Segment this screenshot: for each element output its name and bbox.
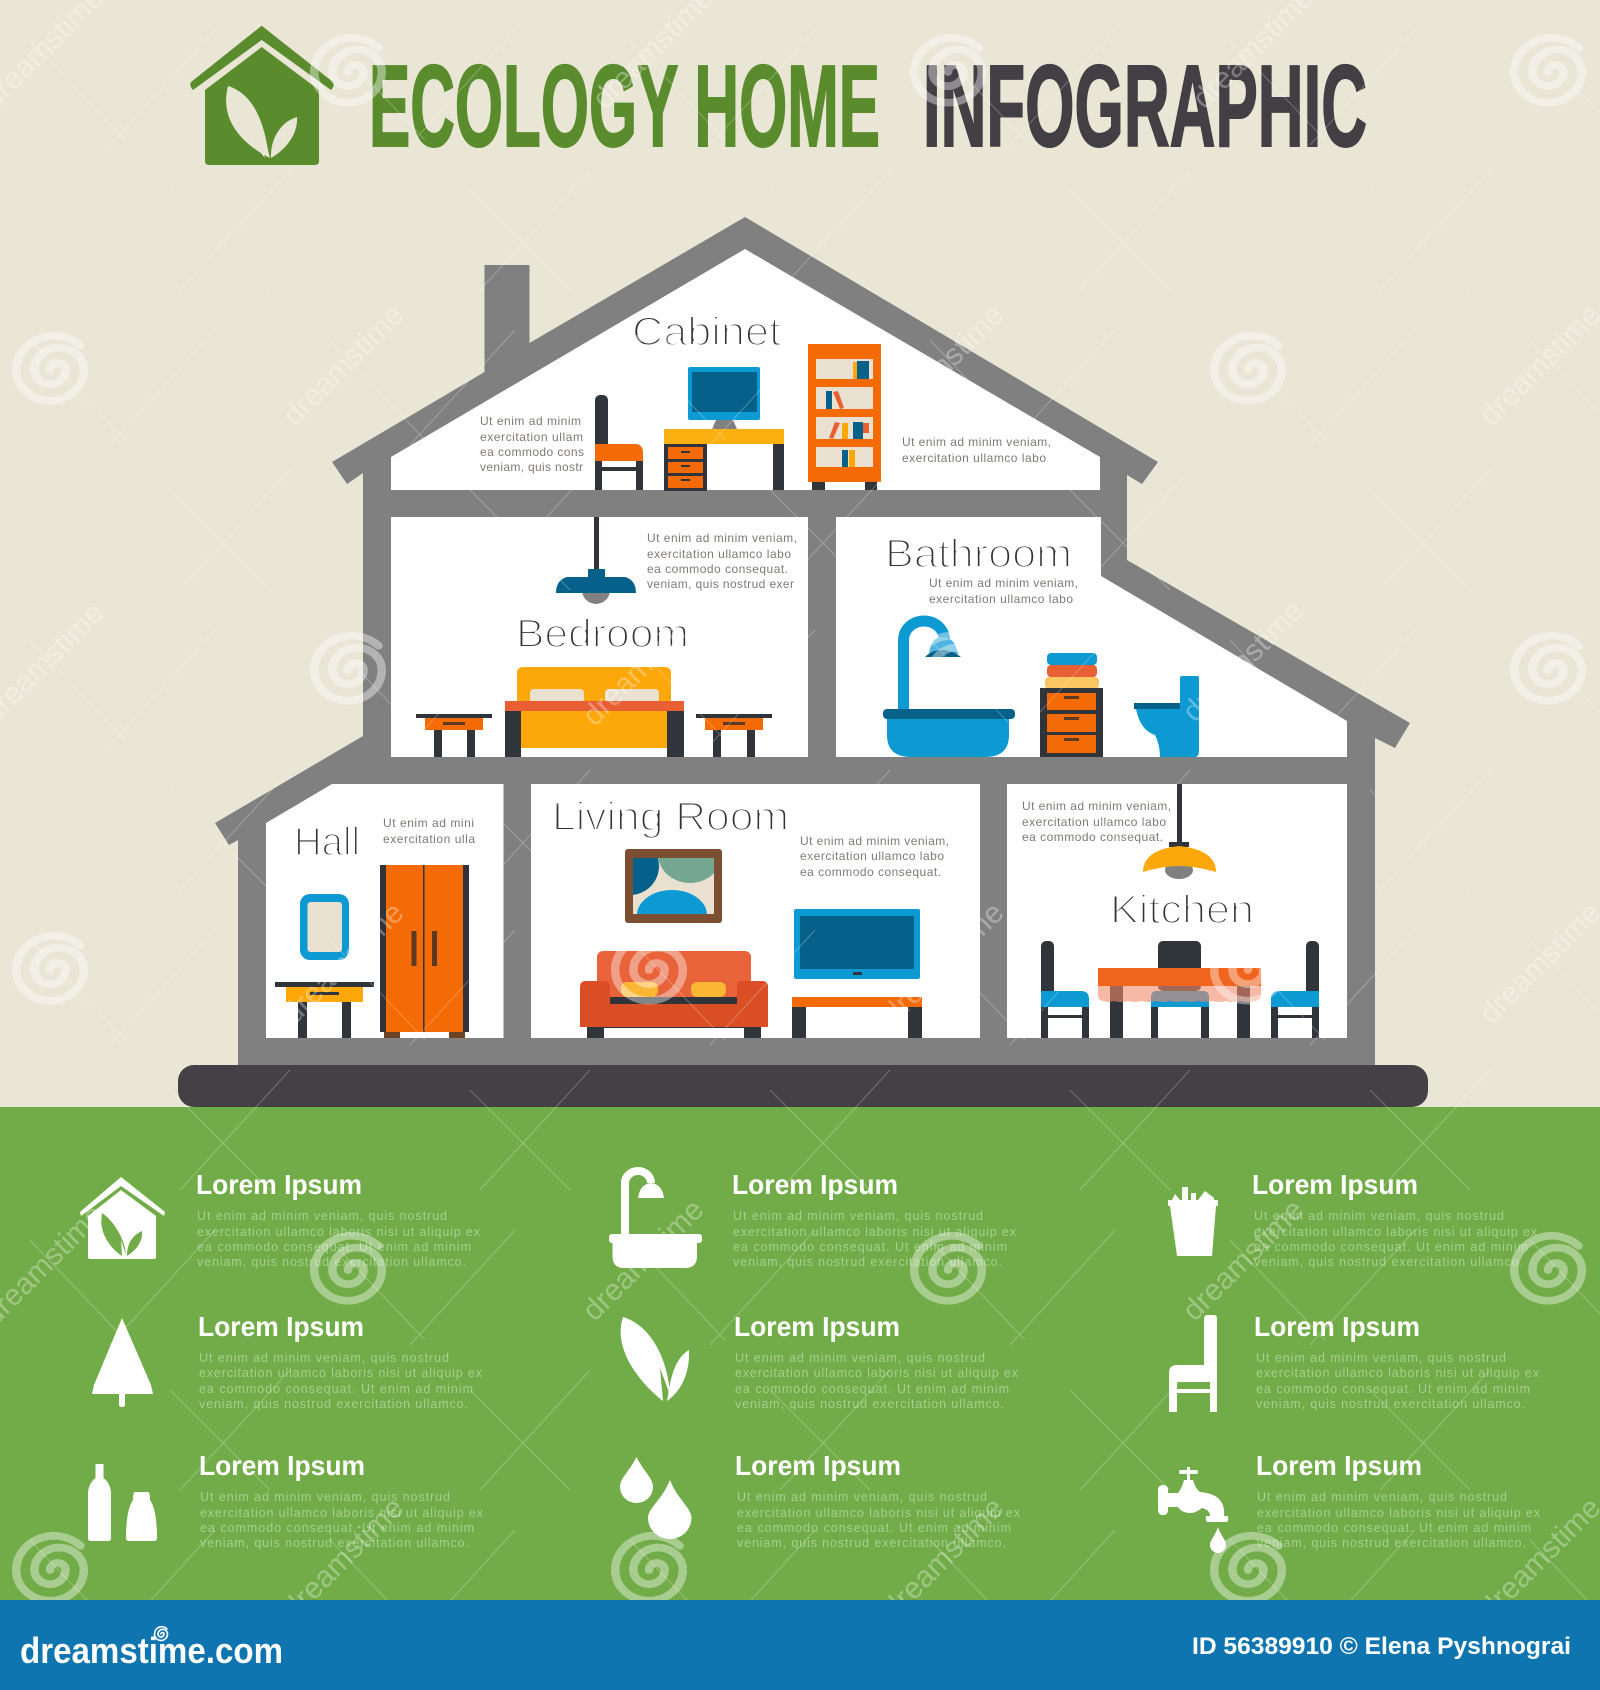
computer monitor [688,367,760,429]
item: leaves: exercitation ullamco laboris nisi ut aliquip ex [735,1366,1019,1380]
text block: kitchen: ea commodo consequat. [1022,830,1163,844]
text block: cabinet right: exercitation ullamco labo [902,451,1046,465]
chair [595,395,643,490]
item: water [735,1450,1021,1550]
heading: Cabinet: Cabinet [632,310,781,354]
watermark layer: dreamstime [876,298,1010,432]
item: leaves: Ut enim ad minim veniam, quis nostrud [735,1351,985,1365]
sofa [580,951,768,1038]
item: water: exercitation ullamco laboris nisi ut aliquip ex [737,1506,1021,1520]
bed [505,667,684,757]
text block: cabinet left: exercitation ullam [480,430,583,444]
towel stack and drawers [1040,653,1103,757]
text block: kitchen: Ut enim ad minim veniam, [1022,799,1171,813]
heading: Bathroom: Bathroom [885,532,1072,576]
text block: bedroom [647,531,797,591]
text block: bathroom: Ut enim ad minim veniam, [929,576,1078,590]
text block: bedroom: exercitation ullamco labo [647,547,791,561]
watermark layer: dreamstime [576,598,710,732]
heading: Living Room: Living Room [552,795,789,839]
panel: living room [531,784,980,1038]
item: furniture: ea commodo consequat. Ut enim ad minim [1256,1382,1530,1396]
item: waste: Lorem Ipsum [1252,1169,1418,1200]
text block: bedroom: ea commodo consequat. [647,562,788,576]
text block: cabinet right [902,435,1051,465]
item: bottles: Ut enim ad minim veniam, quis nostrud [200,1490,450,1504]
item: water: Ut enim ad minim veniam, quis nostrud [737,1490,987,1504]
left nightstand [416,714,492,757]
item: leaves: veniam, quis nostrud exercitation ullamco. [735,1397,1004,1411]
house shell [215,217,1410,1065]
item: bottles: exercitation ullamco laboris nisi ut aliquip ex [200,1506,484,1520]
text block: cabinet left: veniam, quis nostr [480,460,583,474]
text block: cabinet right: Ut enim ad minim veniam, [902,435,1051,449]
television [794,909,920,979]
text block: living room: exercitation ullamco labo [800,849,944,863]
item: bathtub: veniam, quis nostrud exercitation ullamco. [733,1255,1002,1269]
text block: hall: Ut enim ad mini [383,816,474,830]
item: bathtub: ea commodo consequat. Ut enim ad minim [733,1240,1007,1254]
toilet [1134,676,1199,757]
icon: dripping tap [1158,1467,1228,1553]
item: tree [198,1311,483,1411]
item: home: ea commodo consequat. Ut enim ad minim [197,1240,471,1254]
icon: eco house [80,1177,165,1259]
item: leaves: Lorem Ipsum [734,1311,900,1342]
watermark layer: dreamstime [1176,1193,1310,1327]
heading: Bedroom: Bedroom [516,612,689,656]
text block: bathroom: exercitation ullamco labo [929,592,1073,606]
text block: hall [383,816,475,846]
tv table [792,997,922,1038]
item: furniture: exercitation ullamco laboris nisi ut aliquip ex [1256,1366,1540,1380]
item: waste [1252,1169,1538,1269]
desk [664,429,784,491]
item: water: Lorem Ipsum [735,1450,901,1481]
text block: cabinet left: Ut enim ad minim [480,414,581,428]
panel: hall [266,784,504,1038]
item: bottles [199,1450,484,1550]
house base [178,1065,1428,1107]
text block: cabinet left: ea commodo cons [480,445,584,459]
logo icon: green house with leaf [190,26,334,165]
bathtub with shower [883,621,1015,757]
item: water tap [1256,1450,1541,1550]
item: water tap: Ut enim ad minim veniam, quis nostrud [1257,1490,1507,1504]
item: bottles: Lorem Ipsum [199,1450,365,1481]
icon: bottles [88,1464,157,1541]
item: home: veniam, quis nostrud exercitation ullamco. [197,1255,466,1269]
watermark layer: dreamstime [876,1491,1010,1625]
console table [275,982,374,1038]
panel: kitchen [1007,784,1347,1038]
item: tree: Lorem Ipsum [198,1311,364,1342]
item: waste: exercitation ullamco laboris nisi ut aliquip ex [1254,1225,1538,1239]
footer brand: dreamstime.com [20,1630,283,1671]
icon: waste bin [1168,1187,1218,1256]
item: tree: ea commodo consequat. Ut enim ad minim [199,1382,473,1396]
text block: kitchen [1022,799,1171,844]
item: tree: veniam, quis nostrud exercitation ullamco. [199,1397,468,1411]
text block: kitchen: exercitation ullamco labo [1022,815,1166,829]
icon: water drops [620,1457,692,1539]
item: waste: ea commodo consequat. Ut enim ad minim [1254,1240,1528,1254]
icon: bathtub [609,1171,702,1268]
panel: cabinet room [391,249,1100,491]
watermark layer: dreamstime [276,896,410,1030]
icon: leaves [621,1317,689,1401]
text block: bedroom: Ut enim ad minim veniam, [647,531,797,545]
wall mirror [300,894,349,960]
text block: hall: exercitation ulla [383,832,475,846]
centre chair [1151,941,1209,1038]
text block: living room: ea commodo consequat. [800,865,941,879]
item: leaves: ea commodo consequat. Ut enim ad minim [735,1382,1009,1396]
item: bathtub: exercitation ullamco laboris nisi ut aliquip ex [733,1225,1017,1239]
text block: bathroom [929,576,1078,606]
watermark layer: dreamstime [276,1491,410,1625]
item: furniture [1254,1311,1540,1411]
item: bathtub [732,1169,1017,1269]
item: home: Lorem Ipsum [196,1169,362,1200]
right chair [1271,941,1319,1038]
text block: cabinet left [480,414,584,474]
framed picture [625,849,722,923]
item: water tap: exercitation ullamco laboris nisi ut aliquip ex [1257,1506,1541,1520]
item: tree: exercitation ullamco laboris nisi ut aliquip ex [199,1366,483,1380]
item: home [196,1169,481,1269]
right nightstand [696,714,772,757]
watermark layer: dreamstime [876,896,1010,1030]
panel: green information band [0,1107,1600,1600]
item: water tap: ea commodo consequat. Ut enim ad minim [1257,1521,1531,1535]
item: waste: veniam, quis nostrud exercitation ullamco. [1254,1255,1523,1269]
dining table [1098,968,1261,1038]
wardrobe [380,865,469,1038]
panel: bathroom [836,517,1347,757]
item: home: Ut enim ad minim veniam, quis nostrud [197,1209,447,1223]
watermark layer: dreamstime [576,1193,710,1327]
heading: Hall: Hall [294,820,360,864]
item: leaves [734,1311,1019,1411]
heading: Kitchen: Kitchen [1110,888,1254,932]
ceiling lamp [556,517,636,604]
text block: bedroom: veniam, quis nostrud exer [647,577,794,591]
left chair [1041,941,1089,1038]
item: tree: Ut enim ad minim veniam, quis nostrud [199,1351,449,1365]
text block: living room [800,834,949,879]
item: waste: Ut enim ad minim veniam, quis nostrud [1254,1209,1504,1223]
item: bottles: veniam, quis nostrud exercitation ullamco. [200,1536,469,1550]
icon: chair [1169,1315,1217,1412]
item: bathtub: Lorem Ipsum [732,1169,898,1200]
item: water tap: Lorem Ipsum [1256,1450,1422,1481]
bookshelf [808,344,881,490]
panel: bedroom [391,517,808,757]
item: furniture: Lorem Ipsum [1254,1311,1420,1342]
item: furniture: Ut enim ad minim veniam, quis nostrud [1256,1351,1506,1365]
item: water: ea commodo consequat. Ut enim ad minim [737,1521,1011,1535]
item: water: veniam, quis nostrud exercitation ullamco. [737,1536,1006,1550]
footer bar [0,1600,1600,1690]
item: furniture: veniam, quis nostrud exercitation ullamco. [1256,1397,1525,1411]
pendant lamp [1143,784,1216,879]
item: bottles: ea commodo consequat. Ut enim ad minim [200,1521,474,1535]
icon: tree [92,1318,153,1407]
watermark layer: dreamstime [276,298,410,432]
watermark layer: dreamstime [1176,594,1310,728]
title: ECOLOGY HOME [369,41,880,171]
item: home: exercitation ullamco laboris nisi ut aliquip ex [197,1225,481,1239]
text block: living room: Ut enim ad minim veniam, [800,834,949,848]
footer credit: ID 56389910 © Elena Pyshnograi [1192,1633,1571,1660]
item: water tap: veniam, quis nostrud exercitation ullamco. [1257,1536,1526,1550]
item: bathtub: Ut enim ad minim veniam, quis nostrud [733,1209,983,1223]
